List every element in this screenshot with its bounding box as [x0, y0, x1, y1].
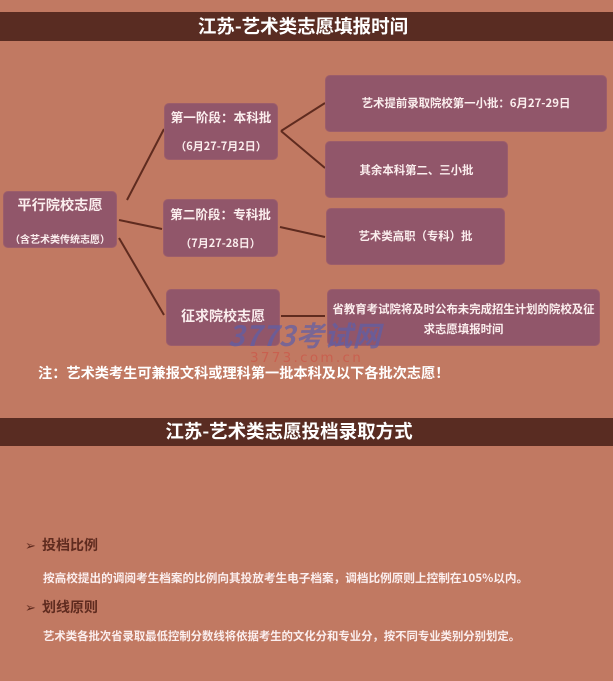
- box: stage two: （7月27-28日）: [180, 235, 261, 251]
- box: early admission batch: 艺术提前录取院校第一小批：6月27-29日: [362, 95, 570, 111]
- box: stage one: [164, 103, 278, 160]
- box: stage one: 第一阶段：本科批: [171, 107, 271, 126]
- box: stage one: （6月27-7月2日）: [175, 138, 267, 154]
- icon: arrow one: ➢: [25, 535, 36, 554]
- title: admission method: [0, 418, 613, 446]
- box: remaining batches: [325, 141, 508, 198]
- text: cutoff principle: 艺术类各批次省录取最低控制分数线将依据考生的文化分和专业分，按不同专业类别分别划定。: [43, 628, 520, 644]
- box: solicitation notice: 省教育考试院将及时公布未完成招生计划的院校及征: [332, 301, 594, 317]
- box: solicited college choices: [166, 289, 280, 346]
- box: solicited college choices: 征求院校志愿: [181, 306, 265, 326]
- box: stage two: [163, 199, 278, 257]
- title: filing time: 江苏-艺术类志愿填报时间: [198, 13, 408, 39]
- watermark: 3773考试网: [228, 315, 381, 355]
- title: admission method: 江苏-艺术类志愿投档录取方式: [165, 418, 413, 444]
- heading: filing ratio: 投档比例: [42, 535, 98, 555]
- box: vocational batch: [326, 208, 505, 265]
- box: solicitation notice: [327, 289, 600, 346]
- icon: arrow two: ➢: [25, 597, 36, 616]
- box: parallel college choices: 平行院校志愿: [17, 195, 103, 215]
- box: stage two: 第二阶段：专科批: [170, 204, 271, 223]
- note: 注：艺术类考生可兼报文科或理科第一批本科及以下各批次志愿！: [38, 363, 449, 383]
- title: filing time: [0, 12, 613, 41]
- box: early admission batch: [325, 75, 607, 132]
- heading: cutoff principle: 划线原则: [42, 597, 98, 617]
- box: remaining batches: 其余本科第二、三小批: [360, 162, 473, 178]
- text: filing ratio: 按高校提出的调阅考生档案的比例向其投放考生电子档案，调档比例原则上控制在105%以内。: [43, 569, 528, 586]
- box: parallel college choices: （含艺术类传统志愿）: [10, 231, 110, 246]
- box: vocational batch: 艺术类高职（专科）批: [359, 228, 472, 244]
- box: parallel college choices: [3, 191, 117, 248]
- box: solicitation notice: 求志愿填报时间: [424, 321, 503, 337]
- watermark: 3773.com.cn: [250, 350, 363, 366]
